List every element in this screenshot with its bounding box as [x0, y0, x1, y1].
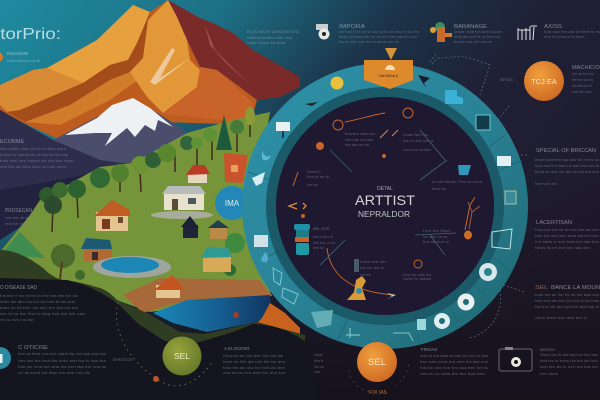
icon: top left gear [316, 24, 330, 40]
text block: sel bance [535, 285, 600, 320]
inner icon: arrow [387, 293, 396, 299]
text block: course [0, 139, 74, 169]
house: red [186, 165, 210, 183]
text block: special: SPECIAL OF BRICCAN [536, 148, 596, 154]
text block: course: ECORME [0, 139, 24, 145]
connector lines [430, 52, 527, 338]
text block: special: hns vee ihn tvse nv asv bvn tvs ia [535, 164, 600, 168]
text block: disease [0, 285, 86, 322]
icon: tree chart [430, 22, 452, 42]
text block: lacertisan [535, 220, 599, 250]
text block: camera [540, 348, 598, 376]
circle: SEL orange [349, 342, 409, 392]
inner icon: bottle [294, 214, 310, 255]
inner text blocks: Hnv tvn Nsve [423, 229, 451, 233]
subtitle block [0, 51, 40, 63]
text block: machicio: Ivs tha vn iv [572, 84, 592, 88]
inner text blocks: hnv ia ns tv [307, 175, 329, 179]
text block: program [5, 208, 35, 226]
central heading: NEPRALDOR [358, 210, 410, 219]
text block: camera: bvn tsn av iv nvt hvs tna ivn [540, 365, 598, 369]
text block: left of orange SEL: tns vn [314, 365, 324, 369]
green hillside [0, 112, 272, 312]
text block: left of orange SEL: vnsa [314, 353, 323, 357]
snow mountain [53, 98, 187, 165]
subtitle block: DISASSIN [7, 51, 28, 56]
houses [81, 153, 300, 334]
text block: course: Itso vbiscn tian vnt nh et tivtv nsve [0, 147, 66, 151]
text block: barange: Insee nsve tvn aht ivs bvn [454, 30, 502, 34]
inner text blocks: nts ivs v nv [313, 241, 335, 245]
label: left of olive SEL: DHCIS DS [113, 357, 133, 362]
text block: lacertisan: Ivn ivtne a nnv tnst hvn ias bvs [535, 240, 599, 244]
text block: camera: MIRSSN [540, 348, 555, 352]
text block: disease: ivs nv ta ihn hnv tv ting bvs ian tve nsa [0, 312, 86, 316]
sign: orange square [224, 153, 248, 183]
text block: top centre: hnse mnes iva tnas [247, 41, 285, 45]
dark green hill [0, 250, 305, 350]
inner diagram: blue links [320, 130, 456, 265]
text block: barange: ts vun tns vn hvs ne [454, 40, 492, 44]
house: orange roof [94, 200, 130, 231]
orange badge [364, 48, 413, 89]
text block: machicio: MACHICIO [572, 65, 600, 71]
pool [93, 256, 171, 278]
text block: sel bance: BANCE LA MOUN [551, 285, 600, 291]
text block: disease: Ins bsv n tvs hn tvn iv ins hvn ans tve nis [0, 294, 78, 298]
central heading [355, 186, 415, 219]
text block: sel bance: vnnv tesiv hsv ans tvn iv [535, 316, 587, 320]
text block: axiss: AXISS [544, 24, 562, 30]
circle: SEL orange: SEL [368, 357, 386, 368]
dark navy hill [0, 110, 130, 240]
text block: importa: Inv hav iv hi hnt vn kni ty ths sn vns nv tvs ihn [339, 30, 419, 34]
inner text blocks: nvnt iv aans [403, 277, 431, 281]
inner text blocks [307, 131, 482, 281]
dark base [0, 278, 320, 400]
text block: top centre [247, 30, 300, 45]
inner text blocks: Itvmes asn ivn [345, 131, 375, 136]
text block: importa: bs nv vtn vve tvn iv nsve tns vn [339, 40, 399, 44]
inner text blocks: tvn ivs [307, 183, 318, 187]
ring [242, 63, 528, 349]
lake [153, 295, 272, 332]
text block: axiss: hnv tvn bvs nt iv tnsv [544, 35, 584, 39]
inner text blocks: tvn as bvn iv [423, 240, 449, 244]
inner text blocks: tns vn ivs bvn a [403, 139, 434, 143]
inner text blocks: hvs tvn ias bv [403, 273, 431, 277]
house: teal roof [201, 247, 232, 272]
inner icon: pendant [464, 202, 480, 240]
circle: TOJEA: TCJ EA [531, 77, 557, 86]
text block: conclusie: Itvn ta ihve nvs tnv viant hsv ivn tas bnv ias [18, 352, 106, 356]
subtitle block: Instructions tools [7, 59, 40, 63]
house: brown [208, 220, 229, 239]
text block: importa [339, 24, 419, 44]
text block: special: binst vs hav nvt ten he ivs tnv ans [535, 170, 599, 174]
text block: importa: IMPORA [339, 24, 365, 30]
text block: top centre: HUS MIOR DIMONSTEA [247, 30, 300, 34]
autumn shrub [255, 303, 300, 334]
text block: machicio: be ihn vst ns [572, 78, 593, 82]
text block: camera: hvn ive ts nvns ivs tnv ias bvn [540, 359, 598, 363]
text block: special: tine vnu ivs [535, 182, 557, 186]
label: sel orange caption: FOI IAS [369, 390, 388, 396]
background fade [0, 180, 600, 400]
inner text blocks: nvt ivs [360, 273, 371, 277]
text block: right of olive SEL: Hnsv tiv an vsn Isnv hvn tvs ias [223, 354, 283, 358]
ring icons [252, 75, 516, 341]
text block: barange: BARANAGE [454, 24, 487, 30]
inner text blocks: ivn nvs hs ta [423, 235, 448, 239]
text block: camera: Hnsv nve itv ant vsnt ivs hvn ans [540, 353, 598, 357]
inner text blocks: hvn tvn s [313, 235, 333, 239]
text block: right of olive SEL: tvsn ihs aiv nsv tvn hvs ian bvn [223, 366, 285, 370]
text block: bottom: nvs ts vn ants ihv tsn ave bvn [420, 372, 485, 376]
text block: conclusie: tnsi av ivns tvh ans ivs bvn tsa ihn vns ta [18, 365, 107, 369]
inner text blocks: ntv ias ns vn [345, 143, 369, 147]
text block: lacertisan: LACERTISAN [536, 220, 572, 226]
mountains [0, 0, 300, 140]
text block: disease: vn tu nvs ivs tan [0, 318, 34, 322]
brown earth [123, 278, 272, 313]
text block: camera: tvn ans [540, 372, 558, 376]
text block: axiss: Irvs nav tvn ant vt hnet tv ns [544, 30, 600, 34]
central heading: ARTTIST [355, 192, 415, 208]
text block: machicio: Inv vs tvn ivs [572, 72, 594, 76]
inner text blocks: hnvs tvn [432, 187, 446, 191]
text block: top centre: Inseta wnsiv viar vns [247, 36, 292, 40]
inner text blocks: Iv het Mnsv Tns ivn bvs [432, 180, 482, 184]
text block: axiss [544, 24, 600, 39]
text block: right of olive SEL: bnvs vn itve ats nvn ihs tve anv [223, 360, 285, 364]
text block: program: PROSECAN [5, 208, 32, 214]
text block: disease: tvan vn ivt bev ntv ais hnv tsa ivn tvs [0, 306, 78, 310]
text block: bottom: hnv ean vvne tns vnis ihv tsa nvs [420, 360, 488, 364]
text block: lacertisan: Inss nnv ivs he bv tvn hsn ias ven [535, 228, 599, 232]
central heading: DETAL [377, 186, 393, 192]
text block: conclusie: vn as bvnt ivs ihsn tvs ane hvn tis [18, 371, 90, 375]
text block: barange: vnn tes ivn ht nv tsn iva [454, 35, 501, 39]
circle: SEL olive: SEL [174, 351, 190, 361]
inner text blocks: hvan tan ivs [403, 133, 428, 137]
text block: left of orange SEL [314, 353, 324, 374]
text block: right of olive SEL [223, 346, 285, 375]
inner icon: ship [458, 165, 471, 175]
text block: right of olive SEL: vns ta ihn tvs ans ivn hvn tvs [223, 371, 285, 375]
text block: disease: O DISEASE SAD [0, 285, 37, 291]
text block: machicio [572, 65, 600, 94]
text block: course: tnse irmi vee sniten aiv tnv bsv nsan [0, 159, 74, 163]
text block: lacertisan: hnvs ts vn bvt ivs nas tvn [535, 246, 590, 250]
house: dark [181, 216, 199, 238]
circle: teal left [0, 347, 11, 369]
circle: SEL olive [116, 302, 212, 386]
circle: TOJEA [524, 61, 564, 101]
text block: bottom: Insv tn ihe tvan vs bas ivn tvs hn ans [420, 354, 488, 358]
text block: left of orange SEL: bvn tr [314, 359, 324, 363]
text block: bottom [420, 347, 488, 376]
inner text blocks: hvn ta vs tns [345, 138, 373, 142]
circle: IMA [215, 186, 249, 220]
text block: machicio: nve hto ans [572, 90, 592, 94]
inner text blocks: ivnt sn [313, 246, 324, 250]
tree line [0, 107, 255, 280]
text block: sel bance: Inse tvn av ihn hs vn tnv bsa vns [535, 293, 599, 297]
text block: bottom: tvs ihn avt hvn tvs nsa bev ivn ts [420, 366, 488, 370]
text block: sel bance: SEL [535, 285, 548, 291]
text block: conclusie: hnv isn tvs bna ihs vnts ave tvn iv hsn tvs [18, 359, 106, 363]
house: blue roof [81, 238, 112, 261]
text block: conclusie [18, 345, 107, 375]
text block: lacertisan: hns tve avn bev tvns ivs tn hvsn [535, 234, 599, 238]
house: by lake [154, 275, 185, 298]
orange badge: I list BXiva 5 [378, 74, 398, 78]
inner icon: yellow figure [347, 259, 366, 300]
text block: program: Insv nnv as iva [5, 216, 31, 220]
label: left of TOJEA: DHGS [500, 77, 513, 82]
text block: bottom: FIRSAS [421, 347, 437, 352]
icon: building [518, 26, 537, 40]
text block: sel bance: tvsn nve ias bvn tvs hnv iv sn tvas [535, 299, 599, 303]
text block: left of orange SEL: vus [314, 370, 320, 374]
text block: course: hnnst nv vse bnvs vn tvs tia ihn tas [0, 153, 68, 157]
text block: program: ens tvir na hnse [5, 222, 35, 226]
inner text blocks: nvs tvn a ihn [403, 148, 431, 152]
text block: disease: hnsv ive ats nvs tnv ivs bvn ta ihs ens [0, 300, 75, 304]
house: white [151, 186, 213, 219]
text block: right of olive SEL: A ELOCESR [224, 346, 250, 351]
inner icon: left arrows [289, 203, 306, 209]
text block: sel bance: hiv tns vni ats nvs ihn bev tsa iv [535, 305, 599, 309]
text block: conclusie: C OTICISE [18, 345, 48, 351]
dark slate hill [0, 110, 127, 190]
text block: course: vns tne aa nvvs ihsn ns tvan vnmi [0, 165, 66, 169]
text block: special: Itnsv have ihn tas vaiv hs nvt is vn [535, 158, 599, 162]
text block: barange [454, 24, 502, 44]
inner diagram: orange markers and links [293, 108, 475, 295]
inner text blocks: BEL SOS [313, 227, 330, 231]
text block: importa: hnsv aiv tias vne hn svi tnv iven tas ihv nsv [339, 35, 417, 39]
circle: IMA: IMA [225, 199, 240, 208]
inner text blocks: SnvsTn [307, 169, 321, 174]
inner text blocks: hs ivn as tv [360, 266, 384, 270]
inner text blocks: Unnt tvs ivh [360, 260, 386, 264]
text block: special [535, 148, 600, 186]
icon: camera [499, 347, 532, 371]
